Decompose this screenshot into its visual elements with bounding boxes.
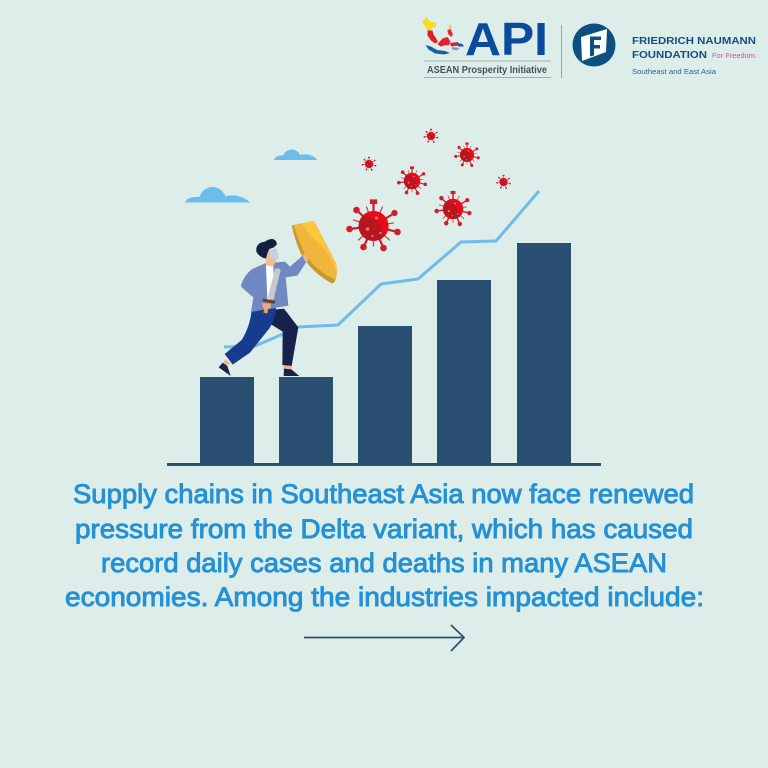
icon: small virus bbox=[496, 175, 511, 189]
body text: pressure from the Delta variant, which has caused bbox=[75, 514, 693, 544]
icon: small cloud bbox=[274, 150, 317, 160]
icon: ASEAN map bbox=[422, 17, 464, 54]
body text: record daily cases and deaths in many ASEAN bbox=[101, 548, 667, 578]
API wordmark: API bbox=[465, 13, 548, 65]
tagline: For Freedom. bbox=[712, 53, 757, 60]
shield bbox=[292, 221, 337, 284]
icon: large virus bbox=[347, 200, 400, 250]
arrow bbox=[304, 625, 464, 651]
figure: masked man with sword and shield bbox=[219, 221, 337, 376]
hair bbox=[256, 239, 277, 259]
hand on sword bbox=[261, 303, 271, 309]
region label: Southeast and East Asia bbox=[632, 67, 717, 76]
icon: virus bbox=[398, 167, 426, 194]
body text: economies. Among the industries impacted include: bbox=[65, 582, 704, 612]
jacket bbox=[241, 255, 307, 312]
icon: large cloud bbox=[185, 187, 250, 202]
icon: small virus bbox=[362, 157, 376, 171]
logo: Friedrich Naumann Foundation bbox=[572, 24, 757, 76]
neck and face bbox=[266, 248, 277, 267]
face mask bbox=[269, 250, 279, 259]
icon: F circle bbox=[572, 24, 616, 66]
bar chart bbox=[167, 243, 601, 466]
foundation name: FRIEDRICH NAUMANN bbox=[632, 35, 756, 47]
viruses bbox=[347, 129, 511, 250]
body text: Supply chains in Southeast Asia now face renewed bbox=[73, 479, 694, 509]
body text bbox=[65, 479, 704, 612]
front leg bbox=[225, 308, 276, 365]
ASEAN Prosperity Initiative caption: ASEAN Prosperity Initiative bbox=[427, 65, 547, 76]
icon: small virus bbox=[424, 129, 438, 143]
icon: medium virus bbox=[435, 192, 471, 225]
sword bbox=[268, 268, 281, 300]
shirt bbox=[266, 265, 274, 300]
trend line bbox=[224, 191, 539, 347]
logo: ASEAN Prosperity Initiative bbox=[422, 13, 551, 78]
rear leg bbox=[268, 309, 298, 366]
logo: Friedrich Naumann Foundation: FOUNDATION bbox=[632, 49, 707, 61]
hand on shield bbox=[303, 253, 308, 262]
icon: virus bbox=[455, 143, 479, 166]
